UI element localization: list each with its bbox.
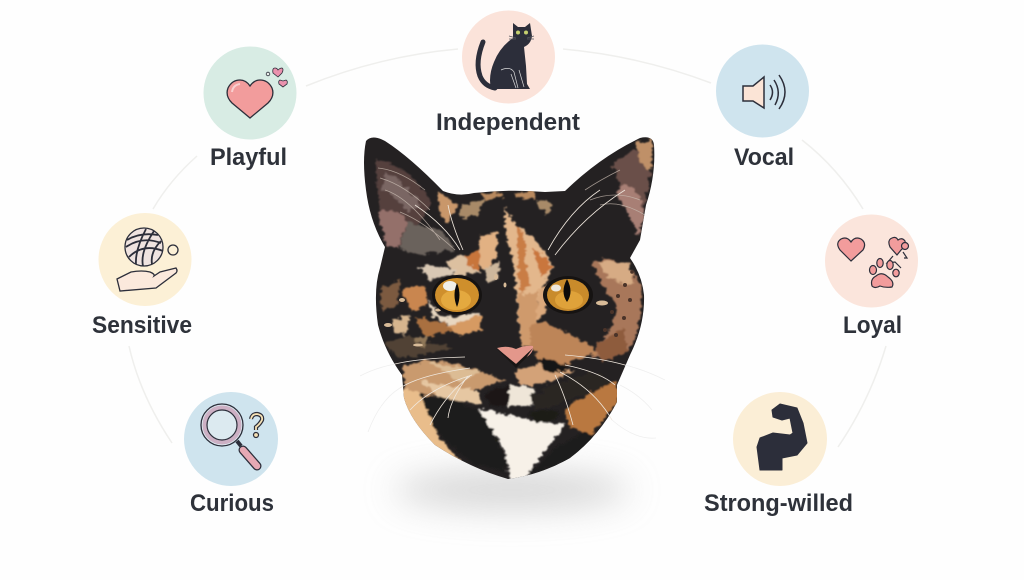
right cheek [590,260,642,358]
ear and brow hair strokes [378,168,645,250]
trait: Playful [204,46,296,171]
whiskers [395,190,625,425]
trait: Vocal [716,44,809,171]
label: Curious [190,490,274,517]
circle [184,392,278,486]
left chest [403,388,462,461]
label: Sensitive [92,312,192,339]
cat shadow [394,470,630,510]
cat portrait [355,130,665,485]
icon: magnifying glass [201,404,257,466]
trait: Strong-willed [704,392,853,517]
nose shadow [496,348,533,368]
head base fur [355,130,665,485]
icon: yarn ball and hand [117,228,178,291]
left muzzle [402,362,505,396]
left brow patches [478,232,497,270]
icon: hearts and paw [838,237,908,288]
trait: Independent [436,10,580,136]
forehead flecks [485,262,500,283]
left cheek mottling [402,285,428,312]
right ear [612,145,650,235]
top of head flecks [482,192,503,200]
label: Strong-willed [704,490,853,517]
circle [716,44,809,138]
label: Independent [436,109,580,136]
light flecks on left cheek [384,274,608,346]
trait: Sensitive [92,213,192,339]
icon: hearts [227,68,287,118]
forehead stripe [505,208,553,348]
chin [484,384,512,406]
right muzzle [515,362,575,385]
label: Vocal [734,144,794,171]
nose [497,346,533,364]
dark specks on right cheek [603,270,634,337]
left eye [432,275,482,315]
circle [204,46,296,140]
label: Playful [210,144,287,171]
trait: Loyal [825,214,918,339]
icon: flexed arm [757,404,807,470]
icon: speaker [743,75,785,109]
trait: Curious [184,392,278,517]
connecting arcs [129,49,886,447]
circle [98,213,192,306]
right chest [565,380,618,436]
label: Loyal [843,312,902,339]
eye surround cream [428,300,480,326]
circle [733,392,827,486]
icon: black cat [478,23,534,89]
left ear [376,160,432,248]
circle [462,10,555,104]
white chest [478,408,565,482]
faint outer whiskers [360,364,665,438]
right eye [543,276,593,314]
circle [825,214,918,308]
icon: question mark [251,414,262,438]
